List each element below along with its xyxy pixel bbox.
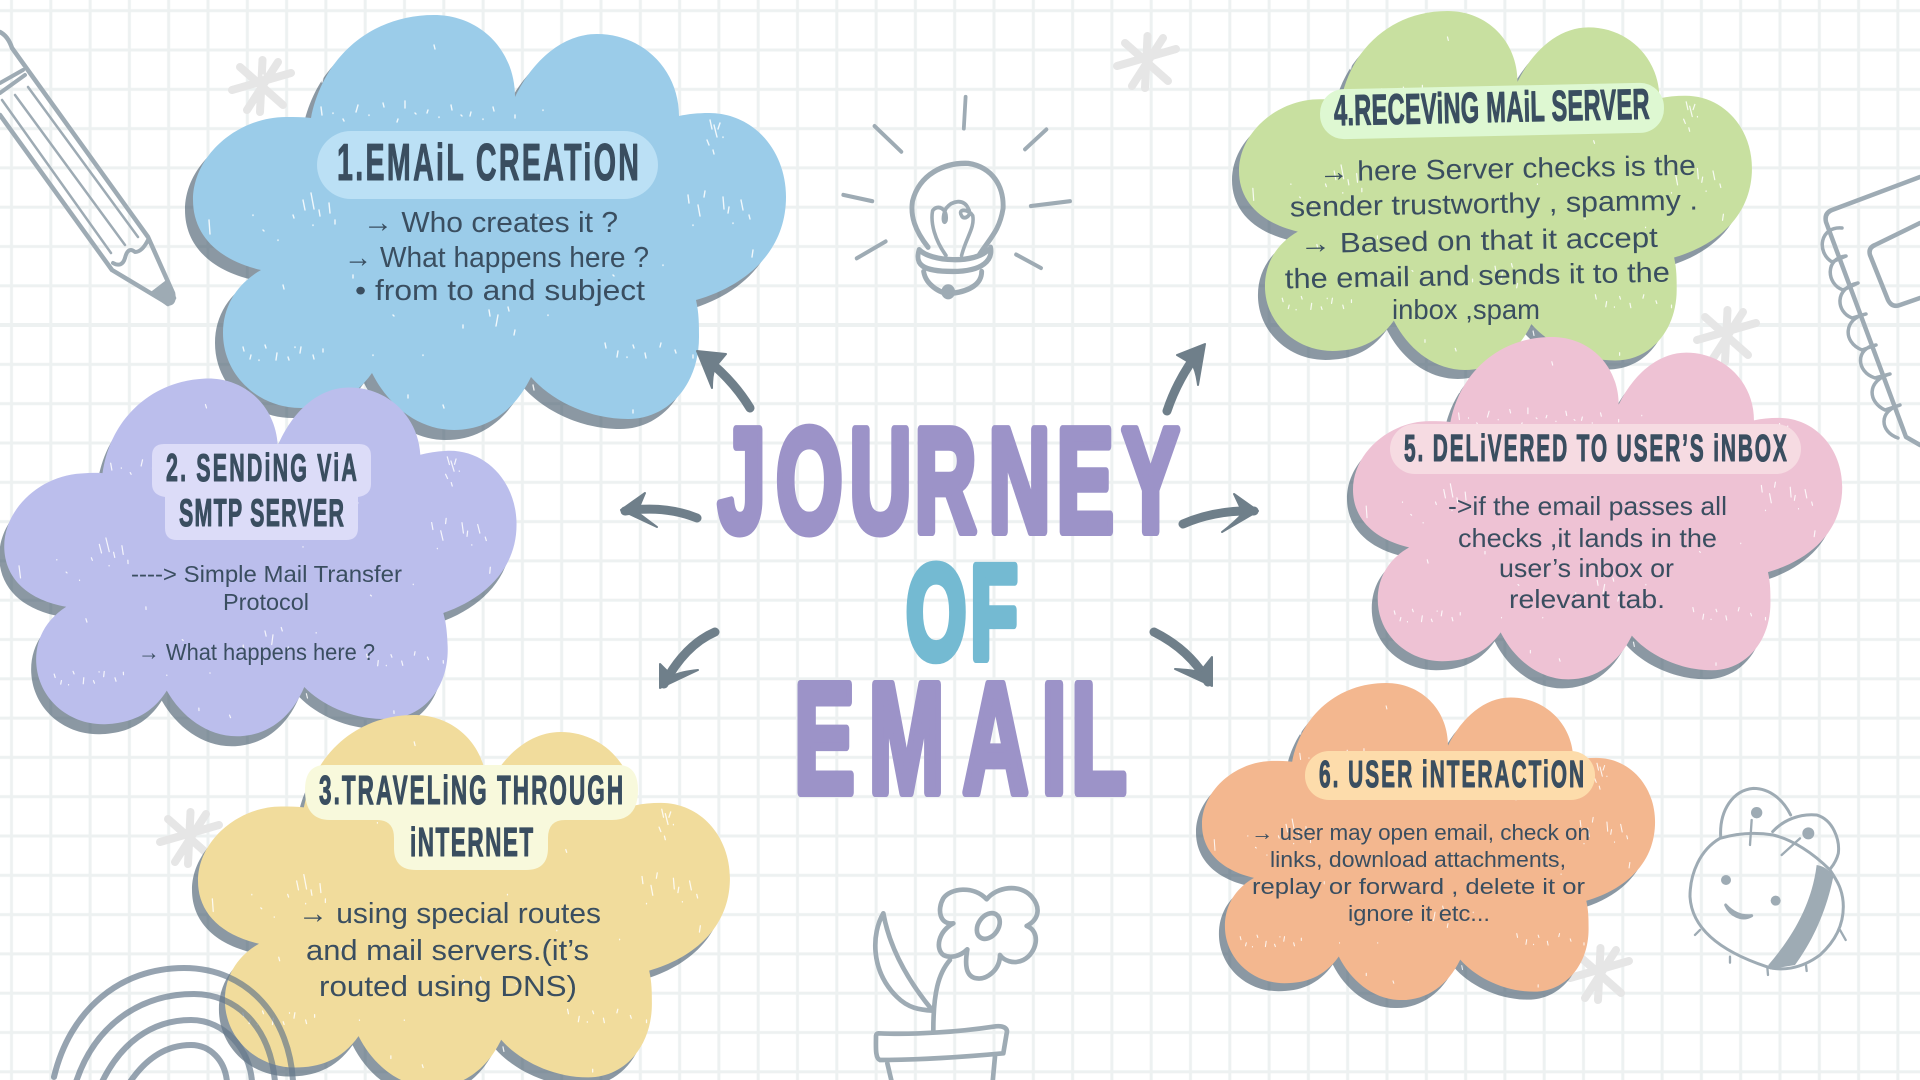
- decorative asterisk right: [1697, 310, 1756, 362]
- decorative asterisk top centre: [1117, 36, 1176, 88]
- heading: 6. USER iNTERACTiON: 6. USER iNTERACTiON: [1319, 754, 1584, 796]
- body text: step 3: → using special routes: [298, 898, 601, 930]
- body text: step 6: [1251, 820, 1590, 926]
- body text: step 2: Protocol: [223, 589, 309, 615]
- cloud: yellow: [192, 715, 730, 1080]
- title: Journey of Email: EMAIL: [794, 652, 1127, 827]
- decorative asterisk top left: [232, 60, 291, 112]
- icon: potted flower: [875, 888, 1038, 1080]
- body text: step 1: • from to and subject: [355, 275, 645, 307]
- arrow: to step 5: [1183, 494, 1258, 532]
- panel: step 6 user interaction: [1196, 683, 1655, 1008]
- heading: 2. SENDiNG ViA SMTP SERVER: 2. SENDiNG ViA: [166, 446, 357, 490]
- decorative asterisk lower right: [1570, 948, 1629, 1000]
- heading: 2. SENDiNG ViA SMTP SERVER: SMTP SERVER: [179, 491, 344, 535]
- body text: step 6: ignore it etc...: [1348, 901, 1490, 926]
- title: Journey of Email: JOURNEY: [718, 397, 1179, 563]
- panel: step 4 receiving mail server: [1232, 11, 1752, 379]
- cloud: orange: [1196, 683, 1655, 1008]
- heading: 2. SENDiNG ViA SMTP SERVER: [152, 444, 371, 540]
- heading: 3.TRAVELiNG THROUGH iNTERNET: [305, 765, 638, 870]
- cloud: blue: [185, 15, 786, 440]
- body text: step 5: relevant tab.: [1509, 584, 1665, 614]
- body text: step 1: → What happens here ?: [344, 242, 649, 274]
- body text: step 2: [131, 561, 402, 665]
- heading: 5. DELiVERED TO USER'S iNBOX: 5. DELiVERED TO USER’S iNBOX: [1404, 428, 1787, 470]
- icon: rainbow: [54, 968, 293, 1080]
- icon: pencil: [0, 32, 174, 304]
- arrow: to step 2: [621, 493, 697, 527]
- cloud: purple: [0, 363, 527, 758]
- body text: step 3: [298, 898, 601, 1003]
- body text: step 5: checks ,it lands in the: [1458, 523, 1717, 553]
- arrow: to step 4: [1167, 344, 1205, 411]
- cloud: pink: [1347, 337, 1842, 688]
- heading: 3.TRAVELiNG THROUGH iNTERNET: 3.TRAVELiNG THROUGH: [319, 768, 623, 814]
- body text: step 2: → What happens here ?: [138, 639, 375, 665]
- body text: step 2: ----> Simple Mail Transfer: [131, 561, 402, 587]
- body text: step 4: the email and sends it to the: [1285, 257, 1670, 294]
- body text: step 6: links, download attachments,: [1270, 847, 1566, 872]
- body text: step 1: → Who creates it ?: [363, 207, 618, 239]
- icon: spiral notebook: [1822, 177, 1920, 445]
- panel: step 1 email creation: [185, 15, 786, 440]
- body text: step 4: [1285, 150, 1698, 325]
- icon: light bulb: [843, 97, 1070, 297]
- arrow: to step 1: [697, 351, 750, 408]
- body text: step 4: → here Server checks is the: [1319, 150, 1696, 187]
- arrow: to step 6: [1154, 632, 1212, 686]
- body text: step 3: and mail servers.(it’s: [306, 935, 589, 967]
- body text: step 4: sender trustworthy , spammy .: [1290, 184, 1698, 223]
- body text: step 6: → user may open email, check on: [1251, 820, 1590, 845]
- body text: step 5: [1448, 491, 1727, 614]
- heading: 1.EMAiL CREATiON: 1.EMAiL CREATiON: [337, 133, 639, 191]
- title: Journey of Email: OF: [906, 539, 1018, 688]
- panel: step 3 traveling through internet: [192, 715, 730, 1080]
- body text: step 1: [344, 207, 649, 307]
- decorative asterisk lower left: [160, 812, 219, 864]
- body text: step 5: user’s inbox or: [1499, 553, 1674, 583]
- body text: step 6: replay or forward , delete it or: [1252, 874, 1585, 899]
- title: Journey of Email: [718, 397, 1179, 827]
- body text: step 5: ->if the email passes all: [1448, 491, 1727, 521]
- cloud: green: [1232, 11, 1752, 379]
- heading: 3.TRAVELiNG THROUGH iNTERNET: iNTERNET: [410, 820, 533, 866]
- body text: step 4: inbox ,spam: [1392, 294, 1540, 325]
- heading: 4.RECEViNG MAiL SERVER: 4.RECEViNG MAiL SERVER: [1333, 82, 1650, 135]
- arrow: to step 3: [660, 632, 715, 688]
- icon: bee: [1690, 788, 1846, 975]
- body text: step 3: routed using DNS): [319, 971, 577, 1003]
- body text: step 4: → Based on that it accept: [1300, 222, 1658, 259]
- panel: step 2 sending via SMTP server: [0, 363, 527, 758]
- panel: step 5 delivered to user's inbox: [1347, 337, 1842, 688]
